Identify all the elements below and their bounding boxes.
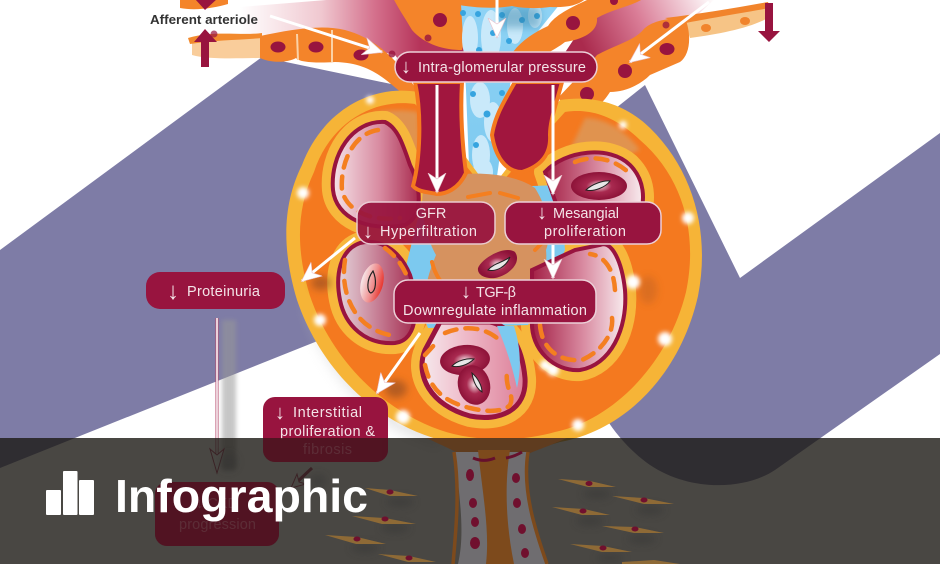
afferent arteriole <box>180 0 470 98</box>
dark banner <box>0 438 940 564</box>
arrow: mesangial to TGF <box>552 245 554 278</box>
pale nuclei <box>701 17 750 32</box>
blue sliver <box>497 326 520 388</box>
label: intra-glomerular pressure: ↓ <box>401 56 411 78</box>
arrow: TGF to interstitial <box>377 333 420 393</box>
slit <box>586 181 610 190</box>
label: mesangial proliferation: ↓ <box>537 202 547 224</box>
label: TGF-beta <box>394 280 596 323</box>
label: interstitial proliferation and fibrosis: fibrosis <box>303 442 352 458</box>
big arrow: efferent down <box>758 3 780 42</box>
label: TGF-beta: ↓ <box>461 281 471 303</box>
gold halo: lobes <box>333 122 643 417</box>
capsule: orange wall <box>300 103 690 439</box>
capsule: outer gold <box>286 91 702 452</box>
spindle cells <box>325 479 680 564</box>
arrow: afferent to pressure <box>270 16 382 52</box>
highlights <box>297 96 694 431</box>
label: GFR hyperfiltration: ↓ <box>363 221 373 243</box>
efferent arteriole <box>513 0 770 110</box>
label: intra-glomerular pressure: Intra-glomerular pressure <box>418 60 586 76</box>
tubule wall <box>455 452 548 564</box>
label: interstitial proliferation and fibrosis: ↓ <box>275 402 285 424</box>
cell divisions <box>297 30 332 62</box>
label: interstitial proliferation and fibrosis <box>263 397 388 462</box>
thin wall strip <box>665 2 770 24</box>
label: proteinuria: Proteinuria <box>187 284 261 300</box>
central slit <box>488 257 510 270</box>
central capillary <box>478 250 517 278</box>
lobe: top left <box>333 122 419 227</box>
tan top shading <box>350 110 640 170</box>
label: interstitial proliferation and fibrosis: proliferation & <box>280 424 375 440</box>
nuclei <box>566 0 674 101</box>
label: CKD progression <box>155 482 279 546</box>
label: CKD progression: progression <box>179 517 256 533</box>
tubule nuclei <box>466 469 529 558</box>
spindle nuclei <box>354 481 648 560</box>
lobe: top right <box>545 152 643 215</box>
mesangium orange marks <box>432 193 545 290</box>
lobe: bottom <box>422 322 525 417</box>
label: CKD progression: ↓ CKD <box>196 496 238 512</box>
label: proteinuria: ↓ <box>167 278 179 305</box>
shadow at top <box>500 6 540 28</box>
central mesangium <box>422 174 549 310</box>
purple rounded band: right <box>500 85 940 485</box>
arrow: interstitial to CKD <box>291 468 312 488</box>
capillary cell <box>571 172 627 200</box>
arrow: proteinuria to CKD <box>210 318 224 473</box>
proteinuria arrow shadow <box>222 320 236 470</box>
label: GFR hyperfiltration: Hyperfiltration <box>380 224 477 240</box>
label: intra-glomerular pressure <box>395 52 597 82</box>
lobe: right <box>532 244 625 370</box>
label: mesangial proliferation: Mesangial <box>553 206 619 222</box>
label: mesangial proliferation: proliferation <box>544 224 626 240</box>
tubule lumen <box>478 450 514 564</box>
lower wall cells <box>558 18 689 110</box>
banner title: Infographic <box>115 470 368 522</box>
blue field <box>461 4 560 190</box>
capillary cell <box>439 343 491 377</box>
label: mesangial proliferation <box>505 202 661 244</box>
purple diagonal band: left <box>0 57 480 468</box>
crimson arcs <box>473 452 522 460</box>
slits <box>452 359 482 392</box>
blue urinary space <box>405 185 565 328</box>
arrow: pressure to mesangial <box>552 85 554 194</box>
afferent arteriole label: Afferent arteriole <box>150 13 258 27</box>
label: GFR hyperfiltration <box>357 202 495 244</box>
label: TGF-beta: Downregulate inflammation <box>403 303 587 319</box>
spindle shadows <box>219 453 664 562</box>
lower wall pale cells <box>192 36 262 58</box>
lobe: left <box>338 242 415 343</box>
lower wall cells <box>260 28 420 98</box>
label: TGF-beta: TGF-β <box>476 285 516 301</box>
soft shadow of glomerulus <box>305 290 450 448</box>
capillary cell <box>356 261 388 305</box>
label: GFR hyperfiltration: GFR <box>416 206 446 222</box>
pale thin wall <box>684 4 770 38</box>
dark shading spots <box>311 276 657 398</box>
central tubule cells: macula densa <box>460 4 560 190</box>
tubule outer lines <box>453 452 547 564</box>
capillary cell <box>453 362 495 408</box>
efferent red channel <box>492 82 562 172</box>
stem top <box>427 438 567 458</box>
dots <box>460 10 540 148</box>
big arrow: afferent up <box>194 29 217 67</box>
lumen <box>228 0 470 95</box>
icon: bar chart logo <box>46 471 94 515</box>
box tints under banner <box>155 438 388 546</box>
arrow: GFR to proteinuria <box>302 238 355 281</box>
label: interstitial proliferation and fibrosis: Interstitial <box>293 405 362 421</box>
upper wall cells <box>513 0 647 66</box>
arrow: top center <box>496 0 498 37</box>
glomerulus <box>286 91 702 452</box>
label: proteinuria <box>146 272 285 309</box>
cells <box>462 4 542 186</box>
arrow: efferent to pressure <box>630 2 709 62</box>
arrow: pressure to GFR <box>436 85 438 192</box>
slit <box>368 271 375 293</box>
nuclei <box>210 13 447 60</box>
tubule and fibroblasts under banner <box>219 438 680 564</box>
lower wall strip <box>188 33 262 44</box>
top orange tubule cells <box>453 0 588 8</box>
big arrow: afferent down <box>195 0 217 10</box>
upper wall cells <box>180 0 466 50</box>
lumen <box>560 0 720 90</box>
afferent red channel <box>413 82 466 194</box>
